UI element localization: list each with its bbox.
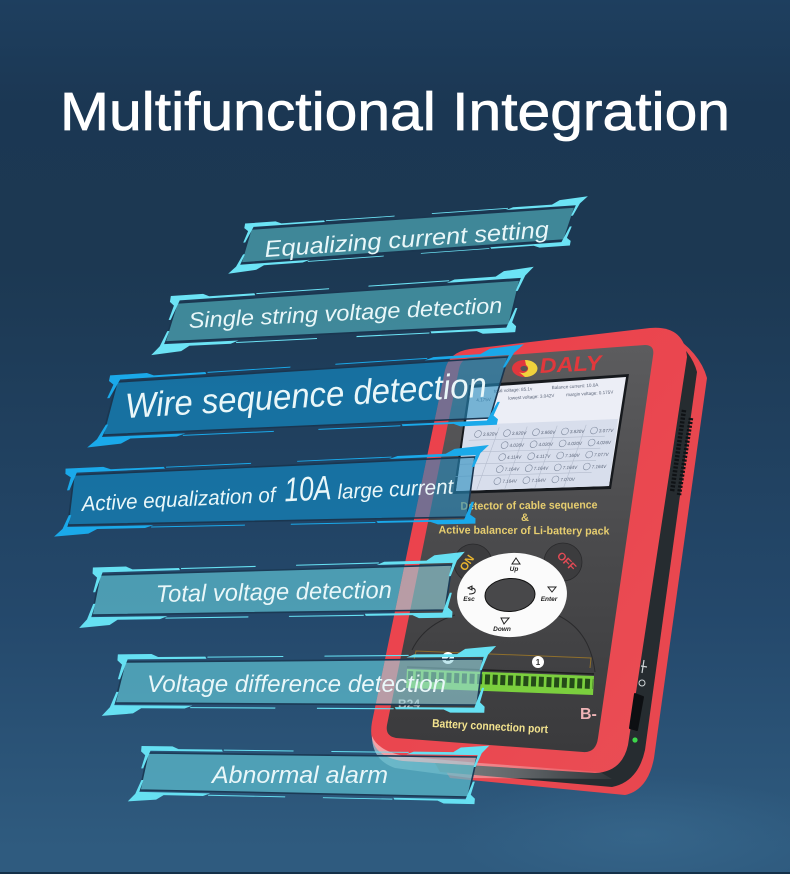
panel: single string voltage detection <box>151 267 534 355</box>
glass highlight on lower edge <box>372 736 612 779</box>
display screen: 3.077V <box>598 428 615 433</box>
logo: DALY <box>539 352 604 378</box>
display screen: 7.164V <box>531 478 547 483</box>
display screen: 3.860V <box>540 430 557 435</box>
navigation keypad: Down <box>493 626 511 633</box>
device back shell <box>400 330 707 795</box>
navigation keypad: Enter <box>541 596 558 603</box>
device caption: & <box>521 512 529 524</box>
display screen: total voltage: 85.1v <box>494 386 533 394</box>
device caption <box>438 499 610 538</box>
battery connection brackets <box>414 651 591 668</box>
display screen: 4.175V <box>476 397 492 403</box>
display screen <box>453 374 629 494</box>
device face <box>387 345 653 752</box>
port labels: B24 <box>398 697 420 711</box>
display screen: 4.020V <box>538 442 554 447</box>
display screen: margin voltage: 0.175V <box>566 389 614 397</box>
display screen: Balance current: 10.0A <box>552 382 599 390</box>
side vents <box>672 410 691 495</box>
background glow below device <box>450 775 790 874</box>
display screen: lowest voltage: 3.042V <box>508 393 555 401</box>
label text: large current <box>337 475 455 504</box>
panel: total voltage detection <box>79 552 465 628</box>
display screen: 7.070V <box>560 477 576 482</box>
device caption: Active balancer of Li-battery pack <box>438 524 610 538</box>
display screen: 4.026V <box>596 440 612 445</box>
green terminal block <box>406 667 594 695</box>
display screen: 4.020V <box>567 441 583 446</box>
navigation keypad: Esc <box>463 596 475 603</box>
device side band <box>400 330 697 787</box>
display screen: 7.160V <box>565 453 581 458</box>
label text: Equalizing current setting <box>264 216 550 262</box>
battery connection brackets: 2 <box>446 654 451 663</box>
display screen: 3.820V <box>569 429 586 434</box>
display screen: 7.164V <box>502 479 518 484</box>
connector dome outline <box>412 615 595 672</box>
port labels <box>398 697 597 736</box>
display screen: 4.026V <box>509 443 525 448</box>
display screen: 7.164V <box>504 467 521 472</box>
display screen: 7.164V <box>562 465 579 470</box>
logo <box>512 352 604 378</box>
label text: Wire sequence detection <box>124 366 488 426</box>
power buttons: ON <box>458 553 477 573</box>
display screen: 3.820V <box>482 431 499 437</box>
label text: Total voltage detection <box>156 577 392 608</box>
display screen: 7.077V <box>594 452 610 457</box>
power buttons: OFF <box>554 550 578 574</box>
navigation keypad: Up <box>510 566 518 573</box>
display screen: 4.114V <box>507 455 523 460</box>
title: Multifunctional Integration <box>60 82 730 142</box>
panel: equalizing current setting <box>228 196 588 274</box>
label text: 10A <box>283 469 332 509</box>
port labels: B- <box>580 706 597 723</box>
panel: voltage difference detection <box>102 646 496 718</box>
battery connection brackets: 1 <box>536 658 541 667</box>
display screen: 7.164V <box>533 466 550 471</box>
panel: wire sequence detection <box>87 344 524 448</box>
label text: Abnormal alarm <box>210 762 388 789</box>
device front shell <box>371 328 687 773</box>
display screen: 7.164V <box>591 464 608 469</box>
device: battery detector and balancer <box>371 328 707 795</box>
bottom edge band <box>0 872 790 874</box>
power buttons <box>454 543 582 582</box>
side USB port and LED <box>630 660 647 743</box>
navigation keypad <box>454 549 570 641</box>
label text: Active equalization of <box>79 484 278 516</box>
panel: active equalization of 10A large current <box>54 445 489 537</box>
display screen: 4.117V <box>536 454 552 459</box>
device caption: Detector of cable sequence <box>460 499 598 513</box>
label text: Voltage difference detection <box>147 671 446 698</box>
label text <box>79 463 455 519</box>
port labels: Battery connection port <box>432 718 548 736</box>
display screen: 3.820V <box>511 431 528 436</box>
label text: Single string voltage detection <box>188 293 503 333</box>
panel: abnormal alarm <box>128 746 490 804</box>
